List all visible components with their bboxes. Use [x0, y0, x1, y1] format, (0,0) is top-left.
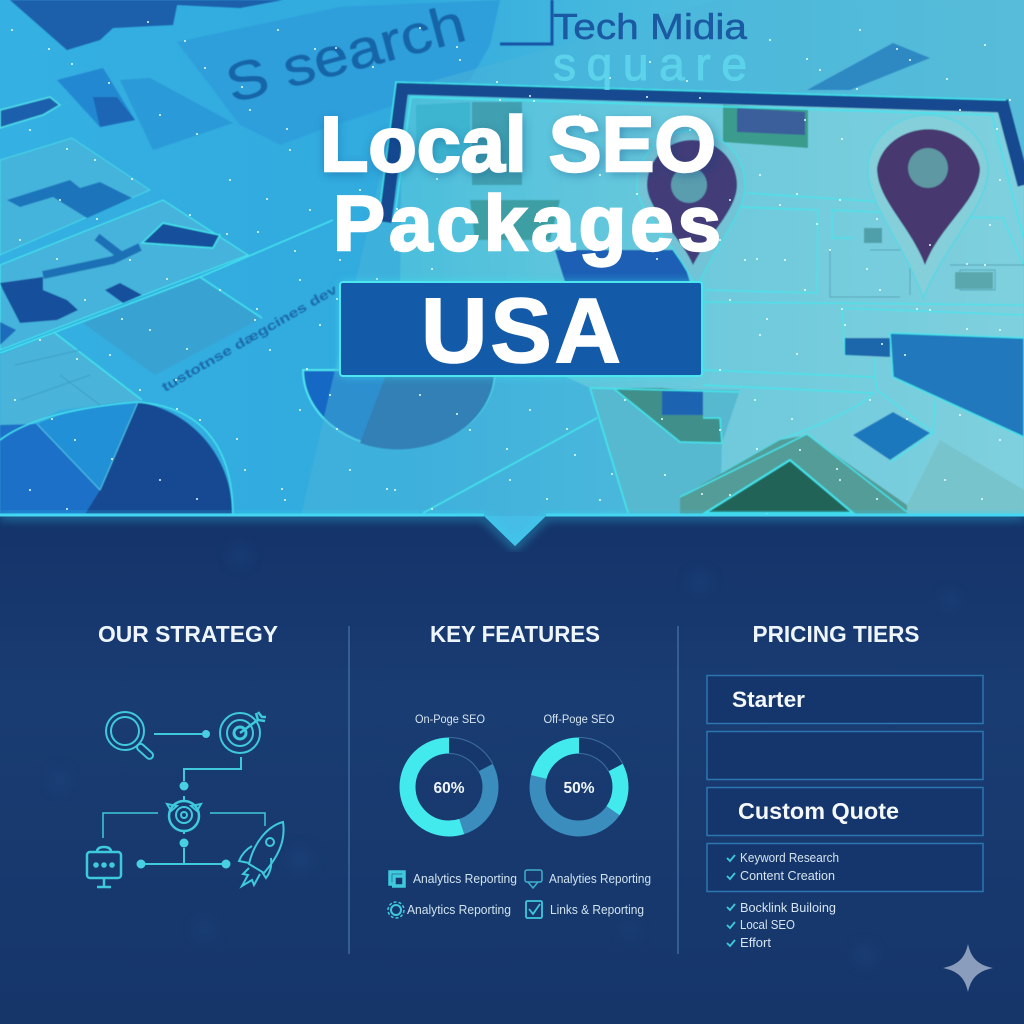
title: Local SEO	[320, 100, 716, 188]
USA badge: USA	[421, 280, 621, 382]
feature row 1 left: Analytics Reporting	[413, 872, 517, 886]
label: on-page seo: On-Poge SEO	[415, 714, 485, 726]
tier: feature list box	[707, 844, 983, 892]
search card: S search	[220, 0, 472, 115]
heading: our strategy: OUR STRATEGY	[98, 621, 278, 647]
top dark map edge	[10, 0, 283, 50]
icon: target with arrow	[220, 712, 266, 753]
hero map background	[0, 0, 1024, 552]
icon: sparkle watermark	[943, 944, 993, 992]
logo: square	[553, 38, 747, 90]
feature row 2 right	[526, 901, 644, 918]
title	[320, 100, 721, 267]
tier: starter: Starter	[732, 687, 805, 712]
feature row 1 right	[525, 870, 651, 888]
donut chart: on-page 60%	[400, 738, 498, 836]
map pins	[637, 115, 988, 298]
tier: starter	[707, 676, 983, 724]
tier: feature list box: Keyword Research	[740, 851, 839, 865]
connector: magnifier to target	[154, 730, 210, 738]
label: off-page seo: Off-Poge SEO	[544, 714, 615, 726]
tier: feature list box: Content Creation	[740, 869, 835, 883]
feature row 2 right: Links & Reporting	[550, 903, 644, 917]
strategy flow diagram	[87, 712, 284, 887]
column: our strategy	[87, 621, 284, 887]
map blocks right	[300, 0, 1024, 520]
tier: empty box	[707, 732, 983, 780]
logo	[553, 6, 748, 90]
connectors: hub to icons	[103, 813, 265, 868]
USA badge	[340, 280, 702, 382]
feature list: Local SEO	[740, 918, 795, 932]
donut value: 60%: 60%	[434, 780, 465, 797]
donut value: 50%: 50%	[564, 780, 595, 797]
feature list: Effort	[740, 936, 772, 950]
icon: central hub	[167, 796, 201, 834]
map blocks left: tustotnse dægcines dev	[159, 281, 341, 395]
feature list	[727, 901, 836, 950]
pie charts	[0, 370, 495, 514]
title: Local SEO	[320, 103, 720, 191]
tier: custom quote: Custom Quote	[738, 798, 899, 824]
logo: Tech Midia	[553, 6, 748, 47]
column: key features	[388, 621, 651, 918]
heading: pricing tiers: PRICING TIERS	[752, 621, 920, 647]
icon: monitor	[87, 847, 121, 887]
connector: target to hub	[180, 757, 241, 790]
feature list: Bocklink Builoing	[740, 901, 836, 915]
tier: custom quote	[707, 788, 983, 836]
speckles	[12, 22, 1010, 519]
feature row 1 right: Analyties Reporting	[549, 872, 651, 886]
icon: rocket	[239, 822, 284, 886]
search card	[177, 0, 552, 145]
heading: key features: KEY FEATURES	[430, 621, 600, 647]
bottom panel	[0, 515, 1024, 1024]
feature row 2 left: Analytics Reporting	[407, 903, 511, 917]
title: Packages	[333, 179, 721, 267]
icon: magnifier	[106, 712, 154, 760]
donut chart: off-page 50%	[530, 738, 628, 836]
column: pricing tiers	[707, 621, 983, 950]
map blocks left	[0, 68, 341, 440]
